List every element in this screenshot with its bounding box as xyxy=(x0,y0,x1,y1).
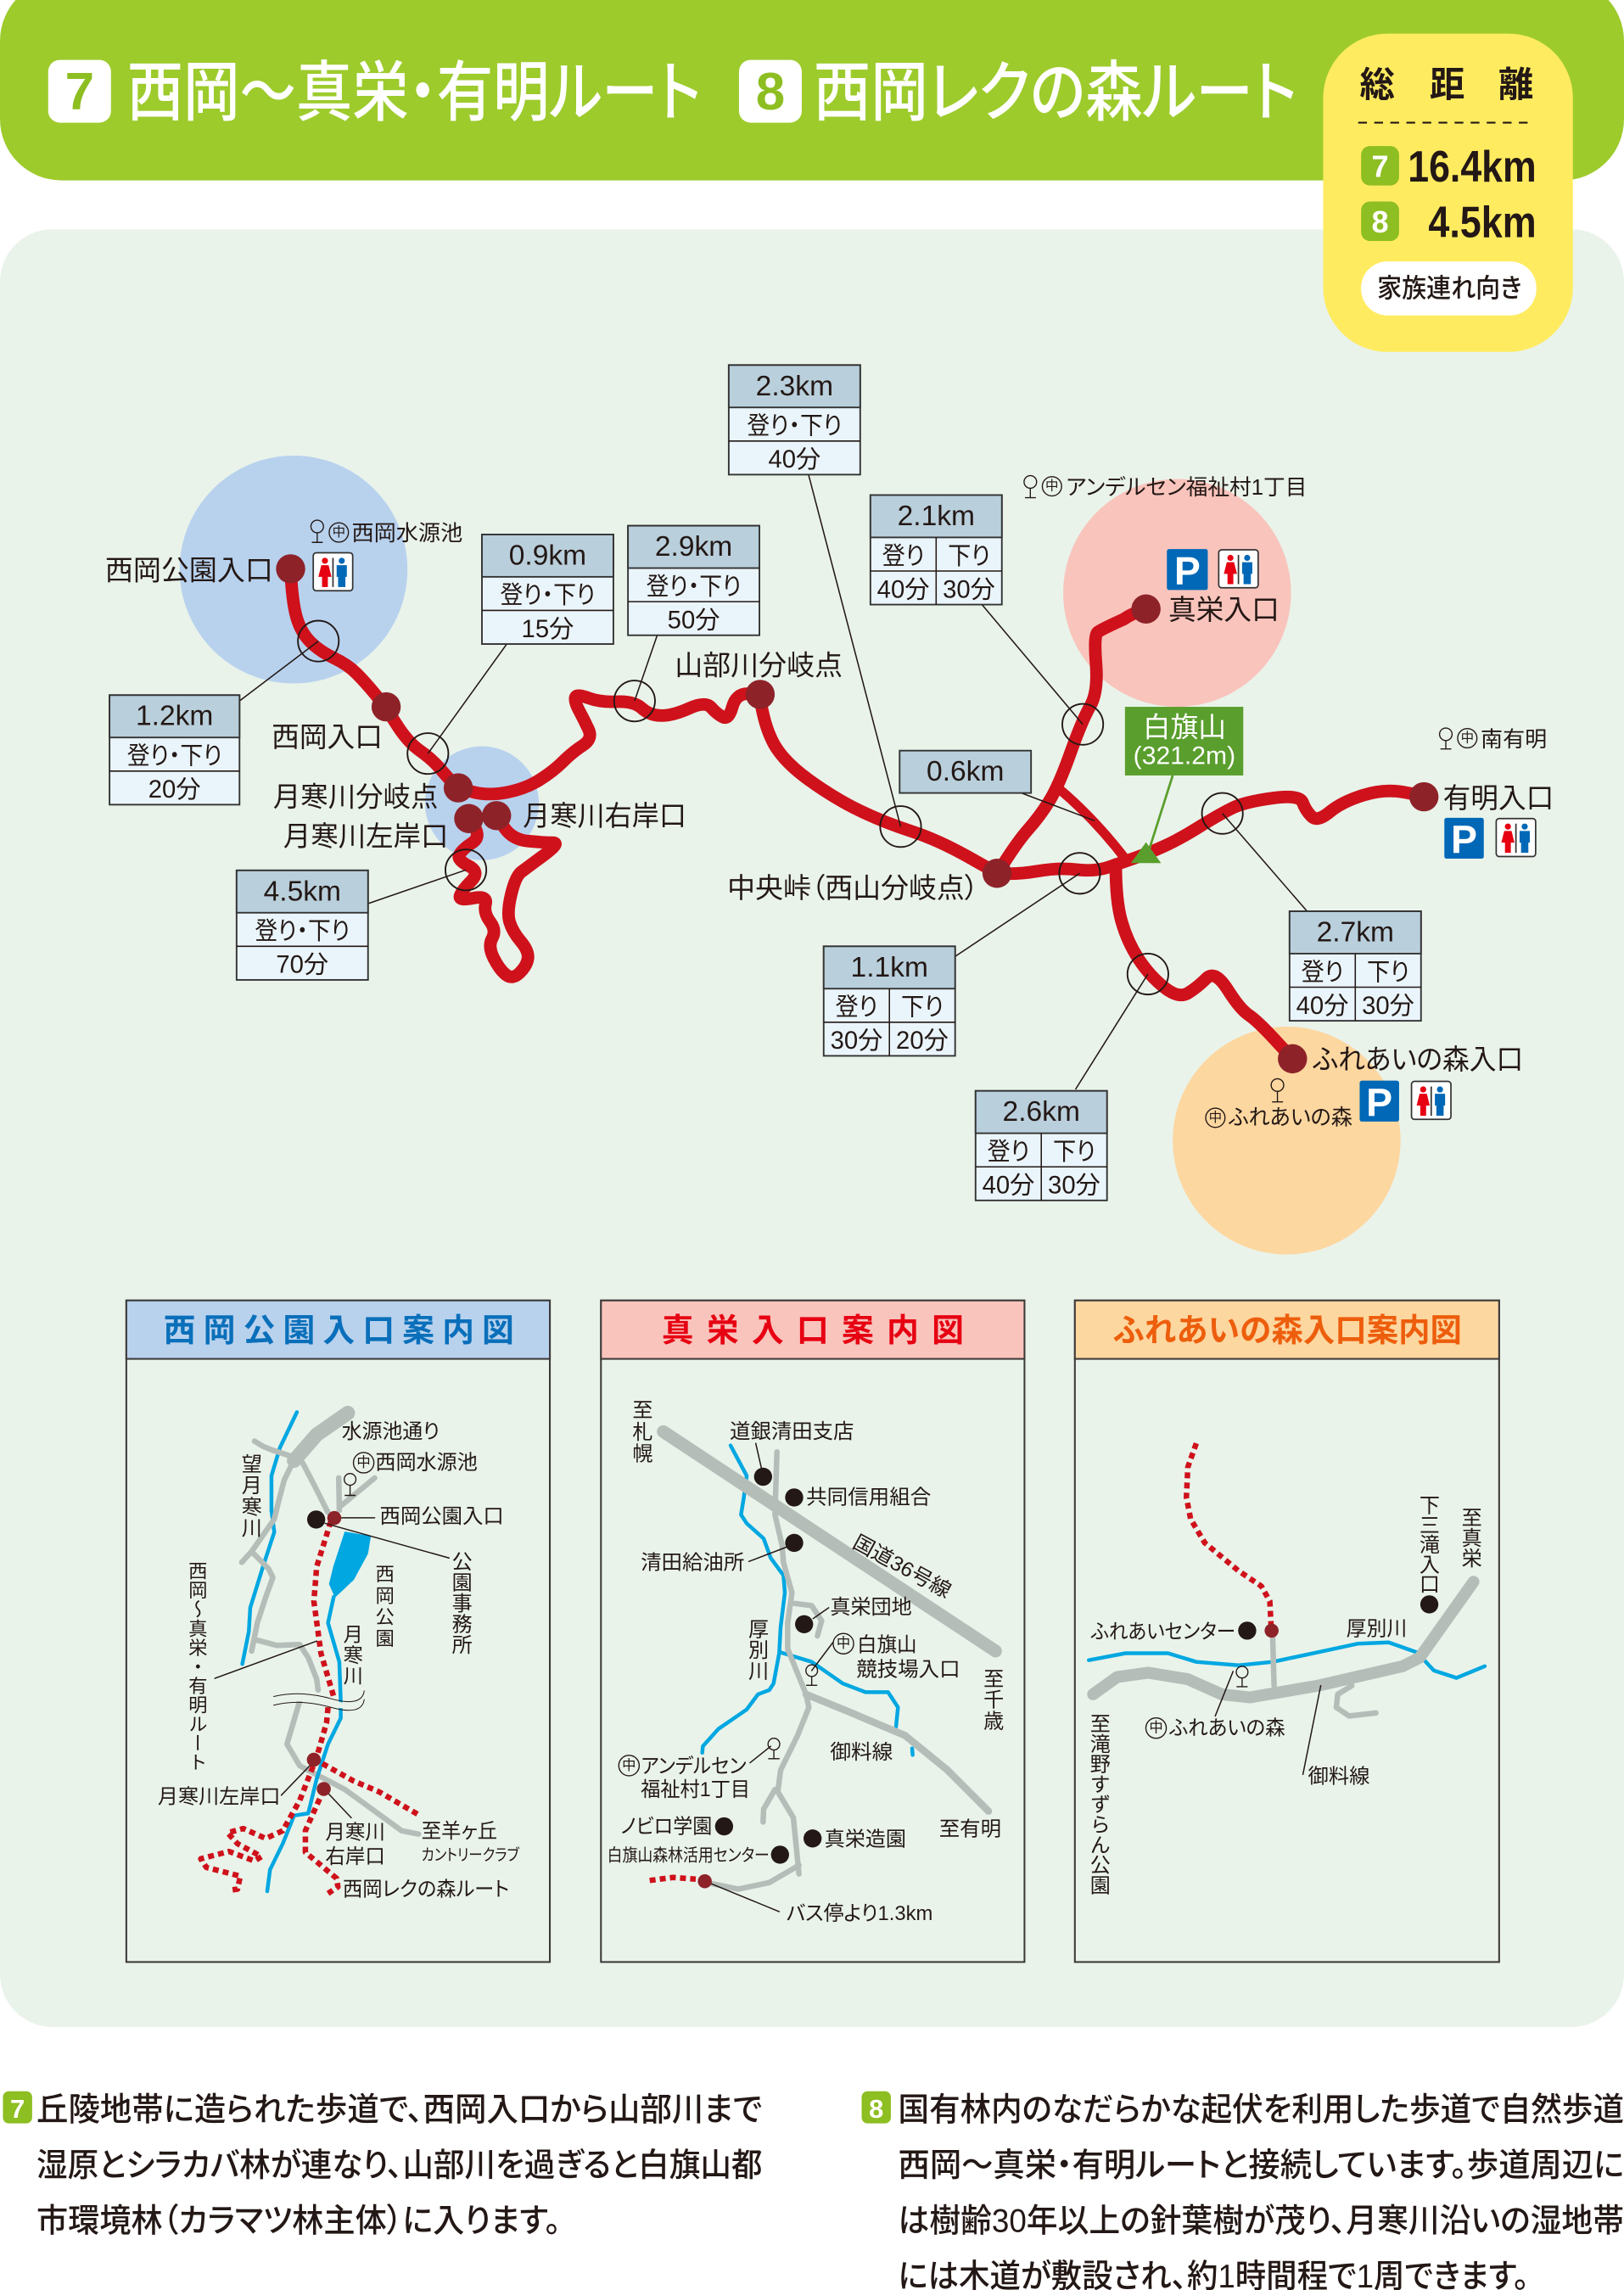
labels 真栄: アンデルセン xyxy=(641,1755,747,1778)
info box: 2.3km xyxy=(729,365,860,474)
info box: 2.6km: 2.6km xyxy=(1003,1096,1080,1128)
panel: total distance: 総 xyxy=(1359,65,1395,104)
info box: 2.7km: 下り xyxy=(1367,959,1409,986)
bus stop label: アンデルセン福祉村1丁目: 中 xyxy=(1045,479,1059,494)
labels 西岡公園: 水源池通り xyxy=(342,1420,440,1443)
labels ふれあいの森: 御料線 xyxy=(1308,1765,1370,1788)
text block: route 7 description: 市環境林（カラマツ林主体）に入ります。 xyxy=(36,2203,561,2239)
info box: 2.6km: 登り xyxy=(988,1138,1029,1166)
labels 西岡公園: 西岡公園 xyxy=(373,1564,395,1648)
bus stop label: 南有明: 南有明 xyxy=(1481,727,1547,752)
labels 西岡公園: 至羊ヶ丘 xyxy=(422,1820,497,1843)
area circle: 真栄 xyxy=(1063,479,1291,707)
info box: 1.1km: 20分 xyxy=(896,1027,949,1055)
panel: total distance: 離 xyxy=(1498,65,1533,104)
info box: 2.7km: 30分 xyxy=(1362,993,1414,1020)
icon: parking 真栄: P xyxy=(1174,549,1201,593)
place labels on route map: 有明入口 xyxy=(1443,782,1554,814)
info box: 2.9km: 登り・下り xyxy=(647,573,742,601)
marker dots 真栄 xyxy=(697,1468,821,1889)
bus stop label: アンデルセン福祉村1丁目: アンデルセン福祉村1丁目 xyxy=(1066,475,1307,500)
info box: 2.9km xyxy=(628,526,759,635)
place labels on route map: 月寒川分岐点 xyxy=(273,781,438,812)
labels 西岡公園: 右岸口 xyxy=(325,1845,385,1868)
text block: route 7 description: 丘陵地帯に造られた歩道で、西岡入口から山部川まで xyxy=(36,2092,762,2129)
labels 真栄 xyxy=(608,1399,1004,1925)
info box: 2.6km: 40分 xyxy=(983,1173,1034,1200)
panel: total distance: 4.5km xyxy=(1428,198,1537,247)
labels ふれあいの森: ふれあいの森 xyxy=(1169,1717,1285,1740)
marker dots ふれあいの森 xyxy=(1238,1595,1438,1640)
info box: 1.1km: 登り xyxy=(836,994,877,1022)
heading: 真栄入口案内図 xyxy=(601,1301,1024,1359)
labels 真栄: 至千歳 xyxy=(980,1668,1004,1731)
heading: route titles: 7 xyxy=(65,63,94,121)
text block: route 7 description: 7 xyxy=(10,2094,25,2124)
labels ふれあいの森: 至真栄 xyxy=(1458,1507,1481,1568)
info box: 4.5km: 登り・下り xyxy=(255,917,350,945)
text block: route 8 description xyxy=(862,2091,1624,2290)
labels 西岡公園: 公園事務所 xyxy=(448,1551,472,1655)
minimap: 西岡公園 roads and streams xyxy=(201,1412,449,1894)
info box: 2.7km: 2.7km xyxy=(1317,916,1394,948)
info box: 2.3km: 2.3km xyxy=(756,371,833,402)
labels 西岡公園: 西岡レクの森ルート xyxy=(343,1878,509,1901)
heading: ふれあいの森入口案内図: ふれあいの森入口案内図 xyxy=(1113,1313,1462,1349)
labels ふれあいの森: 中 xyxy=(1149,1721,1163,1736)
labels 真栄: 中 xyxy=(837,1636,850,1651)
callout: 白旗山: 白旗山 xyxy=(1143,712,1226,743)
place labels on route map: 山部川分岐点 xyxy=(675,650,843,681)
icon: parking 有明: P xyxy=(1451,818,1477,862)
labels 真栄: 至有明 xyxy=(939,1817,1001,1840)
bus stop label: 西岡水源池: 中 xyxy=(333,524,345,540)
place labels on route map: 真栄入口 xyxy=(1168,594,1280,625)
info box: 2.3km: 登り・下り xyxy=(747,412,842,440)
info box: 2.1km: 30分 xyxy=(943,576,995,603)
labels 真栄: 真栄団地 xyxy=(830,1596,912,1619)
info box: 2.9km: 2.9km xyxy=(655,531,732,563)
minimap: 真栄 roads and streams xyxy=(650,1431,995,1912)
panel: total distance: 16.4km xyxy=(1408,142,1537,191)
marker dots 西岡公園 xyxy=(307,1510,341,1796)
info box: 2.6km xyxy=(976,1091,1107,1201)
info box: 0.9km xyxy=(482,535,613,644)
info box: 2.3km: 40分 xyxy=(768,446,820,473)
icon: parking 真栄 xyxy=(1167,549,1207,593)
labels ふれあいの森: 厚別川 xyxy=(1347,1617,1407,1640)
labels ふれあいの森: ふれあいセンター xyxy=(1091,1621,1235,1643)
place labels on route map: 西岡入口 xyxy=(272,721,383,753)
bus stop label: 南有明: 中 xyxy=(1461,731,1474,746)
labels 真栄: 厚別川 xyxy=(745,1618,769,1681)
place labels on route map: ふれあいの森入口 xyxy=(1313,1044,1523,1075)
labels 真栄: 白旗山 xyxy=(857,1633,917,1656)
info box: 2.9km: 50分 xyxy=(668,607,720,635)
info box: 2.6km: 下り xyxy=(1053,1139,1095,1166)
panel: total distance: 8 xyxy=(1372,204,1389,239)
labels 西岡公園 xyxy=(158,1420,520,1901)
route 7 and 8 lines xyxy=(291,569,1424,1059)
place labels on route map xyxy=(105,555,1554,1075)
heading: 真栄入口案内図: 真栄入口案内図 xyxy=(662,1313,964,1349)
callout: 白旗山: (321.2m) xyxy=(1134,743,1235,770)
info box: 1.2km: 登り・下り xyxy=(127,742,222,770)
area circle: ふれあいの森 xyxy=(1173,1027,1401,1255)
labels 西岡公園: 西岡公園入口 xyxy=(380,1505,504,1528)
panel: 西岡公園入口案内図 xyxy=(126,1301,550,1962)
labels 真栄: 至札幌 xyxy=(629,1399,652,1464)
panel: total distance: 距 xyxy=(1430,65,1464,104)
info box: 2.7km xyxy=(1290,911,1421,1021)
panel: 真栄入口案内図 xyxy=(601,1301,1024,1962)
info box: 4.5km: 70分 xyxy=(276,952,328,979)
panel: total distance xyxy=(1323,34,1573,352)
minimap: ふれあいの森 roads and streams xyxy=(1089,1443,1485,1774)
labels 西岡公園: 西岡水源池 xyxy=(375,1451,478,1474)
labels 西岡公園: 月寒川 xyxy=(340,1624,363,1685)
labels 真栄: 国道36号線 xyxy=(849,1531,955,1603)
bus stop label: 西岡水源池: 西岡水源池 xyxy=(351,521,462,546)
info box: 0.9km: 登り・下り xyxy=(501,581,595,609)
icon: parking 有明 xyxy=(1444,818,1484,862)
info box: 1.1km: 1.1km xyxy=(851,952,928,983)
labels 真栄: 御料線 xyxy=(830,1741,893,1764)
place labels on route map: 月寒川左岸口 xyxy=(283,820,448,852)
icon: toilet 西岡 xyxy=(313,552,353,591)
labels ふれあいの森: 至滝野すずらん公園 xyxy=(1086,1713,1110,1895)
info box: 2.7km: 登り xyxy=(1302,958,1344,986)
info box: 0.9km: 0.9km xyxy=(509,540,586,571)
icon: toilet 真栄 xyxy=(1218,550,1258,588)
area circle: 月寒川 xyxy=(425,747,539,860)
bus stop label: 南有明 xyxy=(1440,727,1547,752)
header band xyxy=(0,0,1624,181)
labels 真栄: 福祉村1丁目 xyxy=(641,1778,750,1801)
labels 西岡公園: 望月寒川 xyxy=(238,1453,261,1538)
icon: toilet ふれあいの森 xyxy=(1412,1082,1451,1119)
labels 真栄: 道銀清田支店 xyxy=(730,1420,854,1443)
heading: route titles: 西岡〜真栄・有明ルート xyxy=(127,56,701,129)
info box: 0.9km: 15分 xyxy=(522,616,574,643)
labels 真栄: バス停より1.3km xyxy=(787,1902,932,1925)
info box: 0.6km xyxy=(899,751,1031,793)
text block: route 7 description: 湿原とシラカバ林が連なり、山部川を過ぎると白旗山都 xyxy=(36,2147,762,2184)
bus stop label: 西岡水源池 xyxy=(311,520,462,546)
route point markers xyxy=(276,554,1438,1073)
info box: 1.1km: 下り xyxy=(901,994,944,1022)
panel: total distance: 7 xyxy=(1372,149,1389,184)
info box: 2.1km: 下り xyxy=(948,543,990,570)
icon: parking ふれあいの森: P xyxy=(1366,1080,1392,1124)
labels 西岡公園: 月寒川 xyxy=(325,1822,385,1845)
labels 真栄: 中 xyxy=(622,1758,636,1773)
info box: 2.1km: 登り xyxy=(882,542,925,570)
info box: 4.5km xyxy=(237,871,368,980)
labels 真栄: 真栄造園 xyxy=(825,1828,906,1850)
labels 西岡公園: 中 xyxy=(356,1455,371,1470)
labels ふれあいの森: 下三滝入口 xyxy=(1415,1494,1440,1594)
text block: route 8 description: 8 xyxy=(869,2094,883,2124)
panel: route map background xyxy=(0,229,1624,2027)
info box: 0.6km: 0.6km xyxy=(927,756,1004,787)
panel: ふれあいの森入口案内図 xyxy=(1075,1301,1499,1962)
info box: 2.1km: 2.1km xyxy=(898,501,975,532)
area circle: 西岡公園 xyxy=(180,456,407,684)
labels 真栄: ノビロ学園 xyxy=(621,1816,712,1839)
info box: 1.1km xyxy=(824,946,955,1055)
labels 西岡公園: 月寒川左岸口 xyxy=(158,1785,280,1808)
labels ふれあいの森 xyxy=(1086,1494,1481,1895)
info box: 1.2km: 20分 xyxy=(148,776,201,803)
labels 真栄: 競技場入口 xyxy=(856,1659,960,1682)
labels 西岡公園: 西岡〜真栄・有明ルート xyxy=(186,1561,208,1772)
info box: 4.5km: 4.5km xyxy=(264,876,341,907)
info box: 2.1km: 40分 xyxy=(877,576,929,603)
heading: route titles xyxy=(48,56,1296,129)
info box: 1.2km: 1.2km xyxy=(136,701,213,732)
heading: 西岡公園入口案内図 xyxy=(126,1301,550,1359)
heading: 西岡公園入口案内図: 西岡公園入口案内図 xyxy=(164,1313,514,1349)
bus stop label: ふれあいの森: ふれあいの森 xyxy=(1229,1106,1352,1130)
bus stop label: ふれあいの森 xyxy=(1206,1078,1352,1130)
labels 西岡公園: カントリークラブ xyxy=(422,1845,520,1864)
place labels on route map: 月寒川右岸口 xyxy=(523,800,686,831)
heading: route titles: 8 xyxy=(756,63,785,121)
callout: 白旗山 xyxy=(1125,707,1243,863)
info box: 2.1km xyxy=(871,495,1002,605)
labels 真栄: 白旗山森林活用センター xyxy=(608,1845,770,1865)
heading: ふれあいの森入口案内図 xyxy=(1075,1301,1499,1359)
labels 真栄: 清田給油所 xyxy=(641,1552,744,1575)
place labels on route map: 中央峠（西山分岐点） xyxy=(727,872,978,904)
icon: parking ふれあいの森 xyxy=(1359,1080,1399,1124)
labels 真栄: 共同信用組合 xyxy=(806,1487,931,1509)
info box: 1.2km xyxy=(109,695,239,804)
panel: total distance: 家族連れ向き xyxy=(1377,273,1522,303)
text block: route 7 description xyxy=(3,2091,762,2239)
icon: toilet 有明 xyxy=(1496,819,1536,856)
info box: 2.7km: 40分 xyxy=(1296,993,1348,1020)
heading: route titles: 西岡レクの森ルート xyxy=(814,56,1296,129)
place labels on route map: 西岡公園入口 xyxy=(105,555,273,586)
info box: 1.1km: 30分 xyxy=(831,1027,882,1055)
bus stop label: ふれあいの森: 中 xyxy=(1209,1110,1222,1125)
section circles and leader lines xyxy=(239,474,1307,1089)
info box: 2.6km: 30分 xyxy=(1048,1173,1100,1200)
